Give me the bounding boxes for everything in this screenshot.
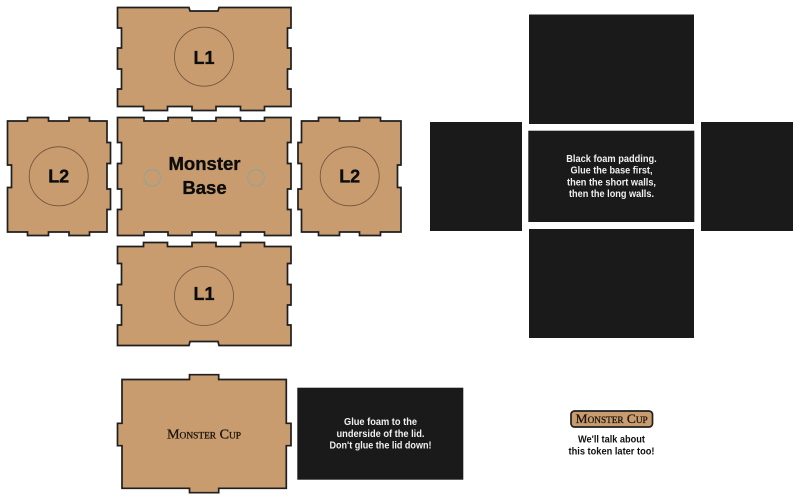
panel: foam base with instructions: then the long walls. <box>569 189 654 200</box>
label: monster base: Monster <box>169 153 240 174</box>
panel: top long wall L1: L1 <box>193 48 215 68</box>
panel: right short wall L2: L2 <box>339 166 360 186</box>
icon: monster cup token: Monster Cup <box>576 411 648 426</box>
icon: left base hole <box>144 170 160 186</box>
panel: foam base with instructions: Black foam padding. <box>566 154 657 165</box>
panel: lid foam with note: Don't glue the lid down! <box>330 440 432 452</box>
panel: left short wall L2: L2 <box>48 166 69 186</box>
panel: lid <box>118 375 291 493</box>
panel: right short wall L2 <box>298 118 401 236</box>
panel: lid foam with note <box>297 388 463 480</box>
panel: foam right short wall <box>701 122 793 231</box>
text: token note: this token later too! <box>568 446 654 458</box>
panel: foam left short wall <box>430 122 522 231</box>
panel: foam bottom long wall <box>529 229 694 338</box>
panel: foam base with instructions: then the short walls, <box>567 178 656 188</box>
label: monster base: Base <box>182 177 227 198</box>
text: token note: We'll talk about <box>578 434 646 446</box>
panel: top long wall L1 <box>118 8 291 110</box>
panel: left short wall L2 <box>8 118 110 236</box>
panel: foam base with instructions: Glue the base first, <box>570 166 653 177</box>
panel: bottom long wall L1: L1 <box>193 284 215 304</box>
panel: foam base with instructions <box>528 131 694 222</box>
text: token note <box>568 434 654 458</box>
panel: lid foam with note: underside of the lid. <box>336 429 425 440</box>
panel: bottom long wall L1 <box>118 242 291 346</box>
icon: right base hole <box>248 170 264 186</box>
panel: lid foam with note: Glue foam to the <box>344 417 417 428</box>
panel: monster base <box>118 118 291 236</box>
panel: foam top long wall <box>529 14 694 124</box>
label: lid logo: Monster Cup <box>167 426 241 442</box>
